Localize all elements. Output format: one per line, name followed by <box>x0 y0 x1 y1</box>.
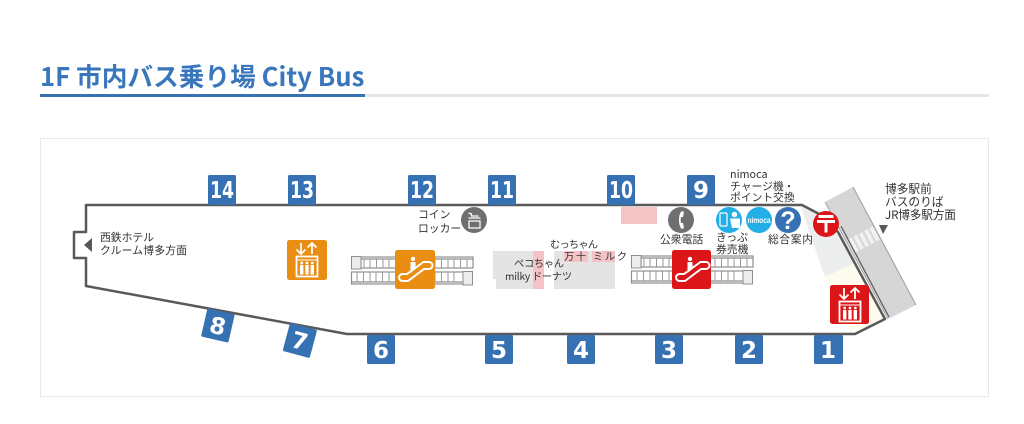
east exit label: JR博多駅方面 <box>885 206 956 223</box>
east escalator <box>631 250 753 289</box>
panel: floor map frame <box>40 138 989 397</box>
orange elevator icon <box>287 240 327 280</box>
ticket machine label: きっぷ <box>716 229 748 245</box>
west exit label <box>100 229 187 258</box>
shop labels: むっちゃん <box>550 236 598 251</box>
coin locker label: ロッカー <box>418 220 461 236</box>
nimoca label: チャージ機・ <box>730 178 794 194</box>
west exit label: クルーム博多方面 <box>100 242 187 258</box>
red escalator icon <box>672 250 711 289</box>
west exit label: 西鉄ホテル <box>100 229 154 245</box>
bus stop 1: 1 <box>820 338 836 364</box>
title: 1F 市内バス乗り場 City Bus <box>40 57 364 94</box>
bus stop 14 <box>208 175 236 205</box>
bus stop 9: 9 <box>693 178 709 204</box>
bus stop 10: 10 <box>609 178 633 204</box>
coin locker label: コイン <box>418 206 450 222</box>
information label: 総合案内 <box>768 231 813 247</box>
nimoca label: nimoca <box>730 166 768 182</box>
shops: gray blocks <box>493 251 615 289</box>
ticket machine label: 券売機 <box>716 241 749 257</box>
west exit arrow <box>84 238 92 252</box>
icon: coin locker <box>461 207 487 233</box>
coin locker label <box>418 206 461 236</box>
bus stop 4 <box>567 335 595 364</box>
bus stop 5 <box>485 335 513 364</box>
road strip with crosswalk <box>825 187 916 319</box>
bus stop 12: 12 <box>410 178 434 204</box>
icon: post box <box>813 211 839 237</box>
bus stop 7 <box>283 323 317 358</box>
nimoca label: ポイント交換 <box>730 189 795 205</box>
icon: nimoca: nimoca <box>748 215 771 225</box>
bus stop 11: 11 <box>490 178 514 204</box>
bus stop 10 <box>607 175 635 205</box>
bus stop 11 <box>488 175 516 205</box>
icon: information <box>775 207 801 235</box>
west escalator <box>351 250 473 289</box>
east exit arrow <box>879 225 888 234</box>
bus stop 14: 14 <box>210 178 234 204</box>
bus stop 8 <box>201 308 235 343</box>
shop labels: ペコちゃん <box>514 255 564 270</box>
cream floor area near elevator <box>825 263 884 333</box>
icon: information: ? <box>780 207 796 235</box>
bus stop 1 <box>814 335 843 364</box>
icon: nimoca <box>746 207 772 233</box>
bus stop 3 <box>655 335 683 364</box>
bus stop 5: 5 <box>491 338 507 364</box>
shops: pink blocks <box>533 207 657 289</box>
building outline <box>74 205 885 334</box>
orange escalator icon <box>395 250 435 289</box>
bus stop 13 <box>288 175 316 205</box>
ticket machine label <box>716 229 749 257</box>
east exit label: バスのりば <box>885 193 944 210</box>
icon: public phone <box>668 207 694 233</box>
bus stop 3: 3 <box>661 338 677 364</box>
east exit label <box>885 180 956 223</box>
shop labels: milky ドーナツ <box>505 268 572 283</box>
light floor area near east entrance <box>800 205 855 277</box>
bus stop 13: 13 <box>290 178 314 204</box>
shop labels: ミルク <box>593 248 627 263</box>
bus stop 6 <box>367 335 395 364</box>
bus stop 7: 7 <box>288 327 311 357</box>
title underline <box>40 94 989 97</box>
bus stop 8: 8 <box>207 312 228 341</box>
red elevator icon <box>830 285 869 324</box>
east wall double line <box>841 226 889 317</box>
bus stop 4: 4 <box>573 338 589 364</box>
shop labels <box>505 236 627 283</box>
shop labels: 万十 <box>564 248 586 263</box>
bus stop 2: 2 <box>741 338 757 364</box>
bus stop 12 <box>408 175 436 205</box>
east exit label: 博多駅前 <box>885 180 932 197</box>
bus stop 2 <box>735 335 763 364</box>
bus stop 9 <box>687 175 715 205</box>
nimoca label <box>730 166 795 205</box>
bus stop 6: 6 <box>373 338 389 364</box>
public phone label: 公衆電話 <box>660 231 703 247</box>
icon: ticket machine <box>716 207 742 233</box>
